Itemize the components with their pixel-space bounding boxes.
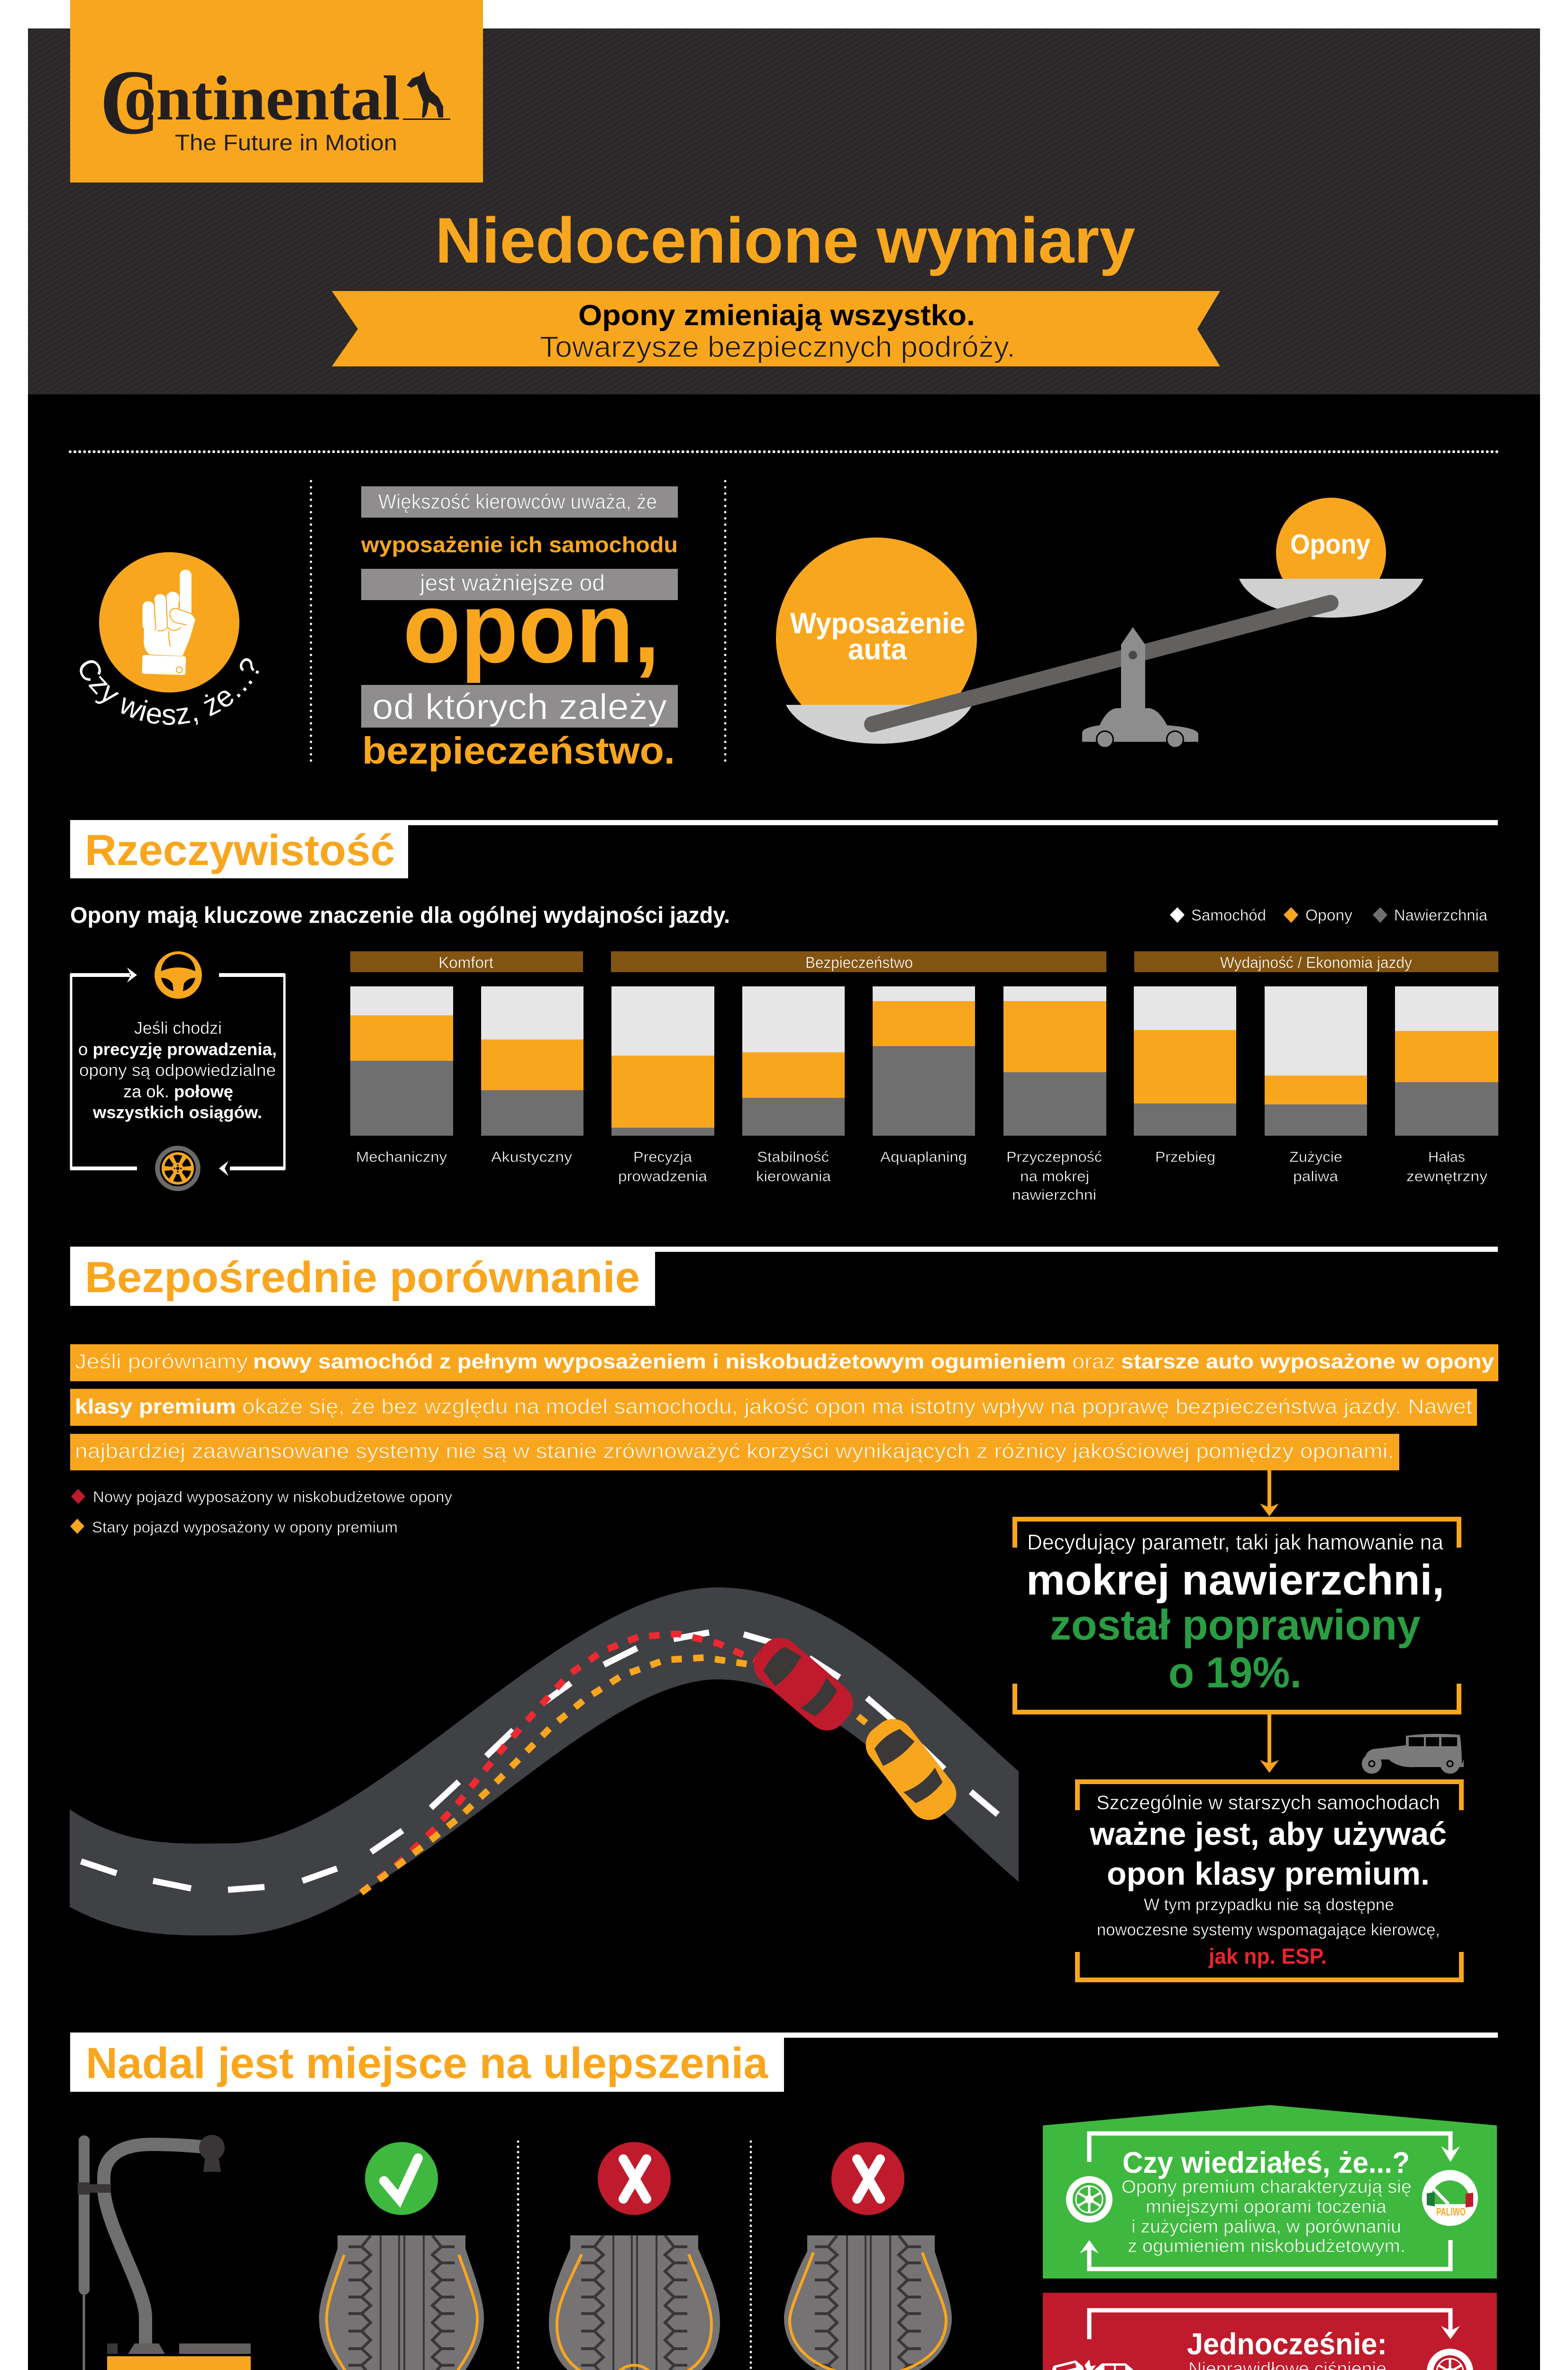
bar labels: nawierzchni <box>1012 1186 1096 1203</box>
panel: dark header band <box>28 28 1540 394</box>
panel: green fact card: Opony premium charakteryzują się <box>1121 2177 1412 2197</box>
category headers: Komfort <box>438 954 493 971</box>
text block: highlighted comparison paragraph: nowy samochód z pełnym wyposażeniem i niskobudżetowym ogumieniem <box>253 1350 1066 1373</box>
ribbon subtitle: Opony zmieniają wszystko. <box>578 299 975 331</box>
callout: premium tyres in older cars: ważne jest, aby używać <box>1089 1816 1447 1852</box>
logo block: The Future in Motion <box>175 130 397 155</box>
text block: highlighted comparison paragraph: oraz <box>1072 1350 1115 1373</box>
panel: green fact card: z ogumieniem niskobudżetowym. <box>1128 2236 1405 2256</box>
legend: road <box>70 1488 452 1536</box>
category headers <box>350 951 1498 972</box>
icon: balance scale <box>776 498 1423 748</box>
legend: chart: Opony <box>1305 906 1353 924</box>
bar chart: contribution of car, tyres, surface <box>350 986 1498 1136</box>
text block: highlighted comparison paragraph <box>70 1344 1498 1470</box>
callout: wet braking improvement <box>1015 1519 1459 1712</box>
callout: premium tyres in older cars: nowoczesne systemy wspomagające kierowcę, <box>1097 1921 1440 1939</box>
icon: hand with curved text "Czy wiesz, że...?" <box>70 552 269 731</box>
bar labels: Aquaplaning <box>880 1149 967 1165</box>
arrow: callout to older cars <box>1260 1714 1279 1773</box>
bar labels: prowadzenia <box>618 1168 708 1185</box>
legend: road: Nowy pojazd wyposażony w niskobudżetowe opony <box>93 1488 452 1505</box>
callout: wet braking improvement: mokrej nawierzchni, <box>1026 1557 1444 1604</box>
text block: highlighted comparison paragraph: klasy premium <box>75 1395 236 1418</box>
ribbon subtitle <box>332 291 1220 366</box>
chart subtitle: Opony mają kluczowe znaczenie dla ogólnej wydajności jazdy. <box>70 903 730 928</box>
bar labels <box>356 1149 1488 1203</box>
callout: wet braking improvement: o 19%. <box>1168 1649 1302 1697</box>
panel: green fact card: Czy wiedziałeś, że...? <box>1122 2146 1410 2179</box>
panel: green fact card: mniejszymi oporami toczenia <box>1146 2197 1387 2217</box>
icon: hand with curved text "Czy wiesz, że...?": Czy wiesz, że...? <box>70 652 269 731</box>
panel: steering and tyre note: Jeśli chodzi <box>134 1018 222 1038</box>
callout: wet braking improvement: Decydujący parametr, taki jak hamowanie na <box>1027 1530 1444 1554</box>
bar labels: na mokrej <box>1020 1168 1089 1185</box>
bar labels: Precyzja <box>633 1149 693 1165</box>
icon: air compressor <box>71 2135 251 2370</box>
illustration: road with two cars <box>70 1587 1019 1935</box>
legend: chart: Samochód <box>1191 906 1266 924</box>
panel: green fact card <box>1043 2105 1497 2279</box>
text block: highlighted comparison paragraph: okaże się, że bez względu na model samochodu, jakość opon ma istotny wpływ na poprawę bezpieczeństwa jazdy. Nawet <box>242 1395 1472 1418</box>
panel: red fact card <box>1043 2293 1497 2370</box>
text block: highlighted comparison paragraph: Jeśli porównamy <box>75 1350 248 1373</box>
callout: premium tyres in older cars: jak np. ESP. <box>1208 1944 1327 1969</box>
logo block: C <box>100 51 159 154</box>
panel: steering and tyre note: o precyzję prowadzenia, <box>78 1039 277 1059</box>
bar labels: Przyczepność <box>1006 1149 1102 1165</box>
panel: normal pressure <box>319 2142 484 2370</box>
section heading: Nadal jest miejsce na ulepszenia: Nadal jest miejsce na ulepszenia <box>86 2039 768 2087</box>
text block: did you know statement: od których zależy <box>372 687 667 727</box>
icon: vintage car <box>1362 1734 1464 1774</box>
callout: wet braking improvement: został poprawiony <box>1050 1602 1421 1649</box>
logo block: ontinental <box>124 63 400 133</box>
section heading: Rzeczywistość: Rzeczywistość <box>85 826 395 875</box>
bar labels: paliwa <box>1293 1168 1339 1185</box>
panel: green fact card: i zużyciem paliwa, w porównaniu <box>1131 2217 1401 2237</box>
panel: high pressure <box>784 2142 952 2370</box>
panel: steering and tyre note: wszystkich osiągów. <box>92 1103 262 1122</box>
bar labels: Stabilność <box>757 1149 829 1165</box>
callout: premium tyres in older cars: opon klasy premium. <box>1107 1856 1430 1892</box>
arrow: paragraph to callout <box>1260 1470 1279 1516</box>
legend: road: Stary pojazd wyposażony w opony premium <box>92 1519 398 1536</box>
bar labels: Zużycie <box>1289 1149 1342 1165</box>
legend: chart <box>1170 906 1488 924</box>
text block: did you know statement <box>361 486 678 772</box>
panel: steering and tyre note <box>70 951 285 1191</box>
icon: balance scale: auta <box>848 633 907 666</box>
bar labels: Mechaniczny <box>356 1149 447 1165</box>
logo block <box>70 0 483 182</box>
text block: did you know statement: Większość kierowców uważa, że <box>378 490 657 513</box>
icon: balance scale: Opony <box>1290 529 1370 560</box>
panel: red fact card: Jednocześnie: <box>1187 2327 1387 2361</box>
section heading: Nadal jest miejsce na ulepszenia <box>70 2033 1498 2092</box>
title: Niedocenione wymiary <box>435 204 1135 276</box>
ribbon subtitle: Towarzysze bezpiecznych podróży. <box>540 331 1015 364</box>
legend: chart: Nawierzchnia <box>1394 906 1488 924</box>
section heading: Rzeczywistość <box>70 820 1498 878</box>
text block: highlighted comparison paragraph: starsze auto wyposażone w opony <box>1121 1350 1495 1373</box>
panel: green fact card: PALIWO <box>1436 2206 1466 2218</box>
text block: highlighted comparison paragraph: najbardziej zaawansowane systemy nie są w stanie zrównoważyć korzyści wynikających z różnicy jakościowej pomiędzy oponami. <box>75 1440 1394 1463</box>
panel: steering and tyre note: za ok. połowę <box>123 1082 233 1101</box>
bar labels: Przebieg <box>1155 1149 1215 1165</box>
text block: did you know statement: bezpieczeństwo. <box>362 729 675 772</box>
bar labels: kierowania <box>756 1168 831 1185</box>
bar labels: Hałas <box>1428 1149 1465 1165</box>
panel: low pressure <box>549 2142 720 2370</box>
section heading: Bezpośrednie porównanie: Bezpośrednie porównanie <box>85 1253 640 1302</box>
category headers: Wydajność / Ekonomia jazdy <box>1220 954 1412 971</box>
text block: did you know statement: wyposażenie ich samochodu <box>361 532 678 557</box>
section heading: Bezpośrednie porównanie <box>70 1247 1498 1306</box>
callout: premium tyres in older cars <box>1077 1782 1461 1980</box>
text block: did you know statement: opon, <box>403 572 660 684</box>
category headers: Bezpieczeństwo <box>805 954 913 971</box>
bar labels: zewnętrzny <box>1406 1168 1488 1185</box>
bar labels: Akustyczny <box>491 1149 573 1165</box>
text block: did you know statement: jest ważniejsze od <box>419 571 605 596</box>
icon: balance scale: Wyposażenie <box>790 607 965 640</box>
panel: steering and tyre note: opony są odpowiedzialne <box>79 1060 276 1080</box>
callout: premium tyres in older cars: Szczególnie w starszych samochodach <box>1096 1791 1440 1814</box>
callout: premium tyres in older cars: W tym przypadku nie są dostępne <box>1144 1896 1394 1914</box>
